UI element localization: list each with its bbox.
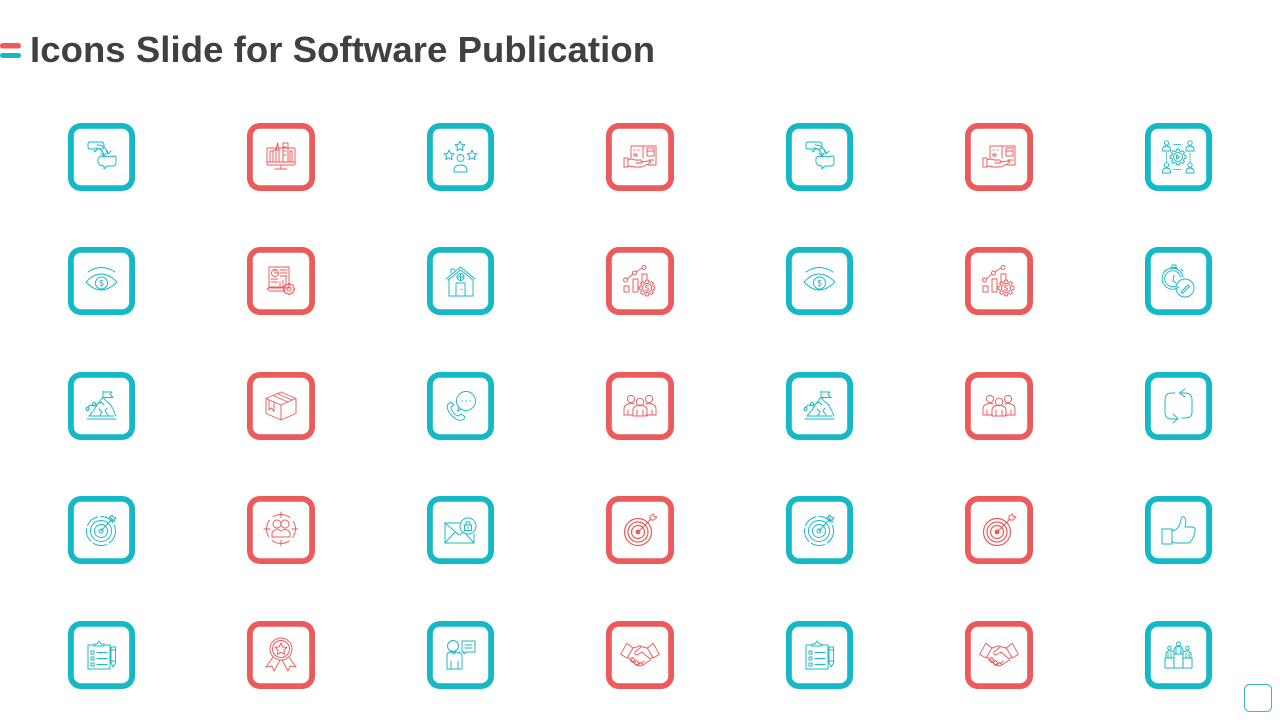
icon: chat exchange	[806, 142, 834, 169]
tile: targeted audience	[250, 499, 312, 561]
icon: package box	[266, 392, 296, 420]
tile: handshake	[609, 624, 671, 686]
icon: handshake	[980, 643, 1018, 666]
tile: team	[968, 375, 1030, 437]
tile: winners podium	[1148, 624, 1209, 686]
tile: dollar eye	[789, 250, 850, 312]
icon: dollar eye: $	[99, 279, 104, 288]
icon: mountain flag	[86, 391, 116, 419]
icon: phone with speech bubble	[447, 392, 476, 420]
tile: refresh arrows	[1148, 375, 1209, 437]
icon: target with arrows	[86, 515, 116, 546]
icon: stopwatch	[1162, 265, 1194, 297]
icon: growth chart with dollar gear: $	[645, 284, 650, 293]
tile: mountain flag	[789, 375, 850, 437]
tile: mountain flag	[71, 375, 132, 437]
tile: target with arrows	[71, 499, 132, 561]
title accent bars	[0, 43, 21, 58]
icon: targeted audience	[264, 512, 298, 546]
tile: growth chart with dollar gear	[968, 250, 1030, 312]
tile: dollar eye	[71, 250, 132, 312]
tile: people around gear	[1148, 126, 1209, 188]
icon: people around gear	[1162, 141, 1194, 173]
icon: star rating person	[444, 141, 477, 172]
icon: hand holding board	[983, 146, 1015, 167]
icon: hand holding board	[624, 146, 656, 167]
icon: person speaking	[447, 640, 475, 669]
icon: thumbs up	[1162, 517, 1195, 544]
tile: bullseye	[968, 499, 1030, 561]
corner outline box	[1244, 684, 1272, 712]
icon: bullseye	[984, 514, 1016, 546]
icon: handshake	[621, 643, 659, 666]
tile: star rating person	[430, 126, 491, 188]
tile: award ribbon	[250, 624, 312, 686]
icon: dollar eye: $	[817, 279, 822, 288]
icon: report with gear	[267, 267, 295, 295]
tile: report with gear	[250, 250, 312, 312]
tile: target with arrows	[789, 499, 850, 561]
icon: refresh arrows	[1165, 389, 1192, 423]
tile: checklist and pencil	[71, 624, 132, 686]
icon: team	[983, 395, 1015, 416]
tile: monitor analytics	[250, 126, 312, 188]
icon: checklist and pencil	[88, 641, 116, 669]
tile: hand holding board	[609, 126, 671, 188]
tile: phone with speech bubble	[430, 375, 491, 437]
tile: locked envelope	[430, 499, 491, 561]
tile: house	[430, 250, 491, 312]
tile: package box	[250, 375, 312, 437]
tile: growth chart with dollar gear	[609, 250, 671, 312]
icon: locked envelope	[445, 518, 476, 543]
icon: bullseye	[624, 514, 657, 546]
tile: bullseye	[609, 499, 671, 561]
icon: winners podium	[1165, 642, 1192, 668]
icon: target with arrows	[804, 515, 834, 546]
icon: team	[624, 395, 656, 416]
tile: hand holding board	[968, 126, 1030, 188]
icon: award ribbon	[266, 638, 296, 671]
icon: chat exchange	[88, 142, 116, 169]
tile: chat exchange	[789, 126, 850, 188]
icon: growth chart with dollar gear: $	[1004, 284, 1009, 293]
icon: house	[446, 267, 475, 296]
tile: checklist and pencil	[789, 624, 850, 686]
icon: checklist and pencil	[806, 641, 834, 669]
tile: team	[609, 375, 671, 437]
tile: stopwatch	[1148, 250, 1209, 312]
icon: monitor analytics	[267, 143, 295, 169]
tile: chat exchange	[71, 126, 132, 188]
tile: thumbs up	[1148, 499, 1209, 561]
icon: mountain flag	[804, 391, 834, 419]
title: Icons Slide for Software Publication	[30, 29, 655, 70]
tile: handshake	[968, 624, 1030, 686]
tile: person speaking	[430, 624, 491, 686]
